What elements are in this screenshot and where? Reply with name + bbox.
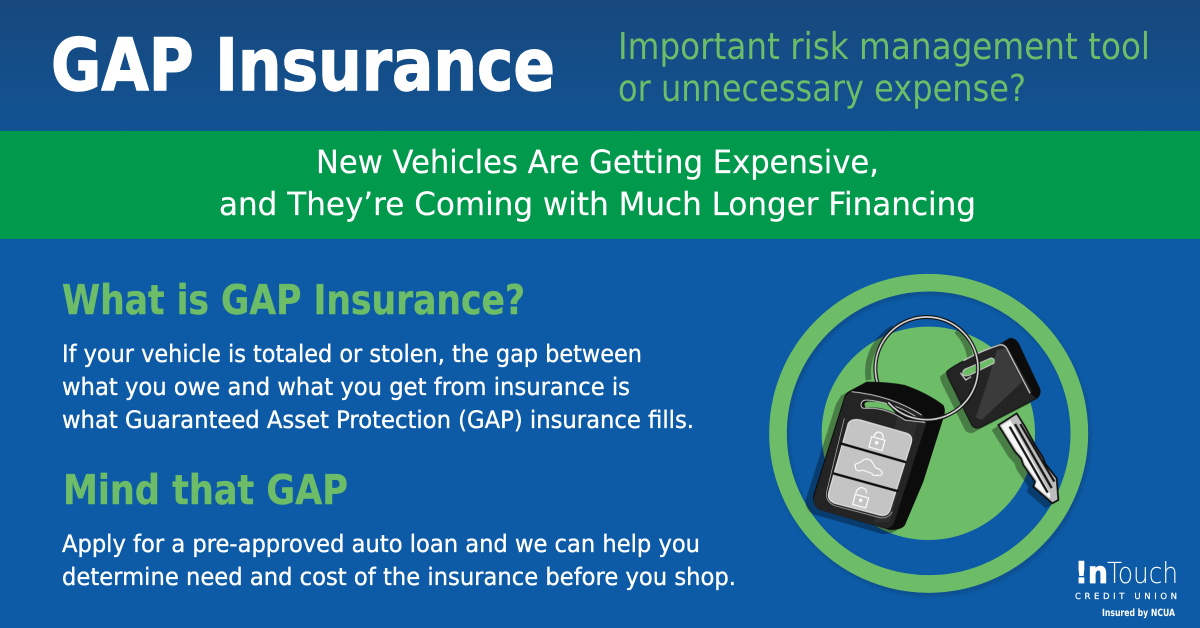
fob slot	[861, 400, 924, 422]
key head	[947, 338, 1040, 428]
key	[947, 338, 1058, 503]
ring shadow	[780, 286, 1081, 587]
logo: InTouch Credit Union	[1075, 556, 1178, 619]
fob back	[813, 382, 945, 530]
text block: definition: what you owe and what you get from insurance is	[62, 373, 630, 401]
green ring	[778, 283, 1079, 584]
key head slot	[963, 358, 994, 376]
green banner: and They’re Coming with Much Longer Financing	[219, 185, 976, 223]
green disc	[822, 327, 1035, 540]
text block: call to action: determine need and cost of the insurance before you shop.	[62, 563, 736, 591]
text block: call to action: Apply for a pre-approved auto loan and we can help you	[62, 530, 700, 558]
unlock icon	[853, 488, 869, 508]
subtitle	[618, 25, 1150, 110]
key blade	[998, 413, 1058, 503]
logo: InTouch Credit Union: !n	[1075, 556, 1108, 591]
lock icon	[869, 432, 885, 451]
text block: definition: what Guaranteed Asset Protection (GAP) insurance fills.	[62, 406, 694, 434]
panel: body background	[0, 239, 1200, 628]
key ring front arc	[888, 402, 947, 420]
green banner	[0, 131, 1200, 239]
heading: mind that GAP: Mind that GAP	[63, 466, 348, 514]
header band	[0, 0, 1200, 131]
text block: definition	[62, 340, 694, 434]
fob button panel	[828, 420, 912, 515]
car icon	[855, 459, 882, 476]
logo: InTouch Credit Union: Touch	[1107, 556, 1178, 590]
shadows of keys	[806, 328, 1052, 534]
key ring	[875, 317, 978, 420]
text block: call to action	[62, 530, 736, 591]
logo: InTouch Credit Union: CREDIT UNION	[1075, 592, 1177, 602]
logo: InTouch Credit Union: Insured by NCUA	[1102, 608, 1175, 619]
text block: definition: If your vehicle is totaled or stolen, the gap between	[62, 340, 642, 368]
heading: what is GAP insurance: What is GAP Insurance?	[62, 276, 525, 324]
green banner: New Vehicles Are Getting Expensive,	[316, 143, 879, 181]
fob front	[814, 392, 926, 528]
button dividers	[833, 443, 906, 491]
title: GAP Insurance	[51, 23, 555, 107]
icon: car keys in green ring	[778, 283, 1081, 587]
subtitle: or unnecessary expense?	[618, 67, 1026, 110]
key fob	[813, 382, 945, 530]
